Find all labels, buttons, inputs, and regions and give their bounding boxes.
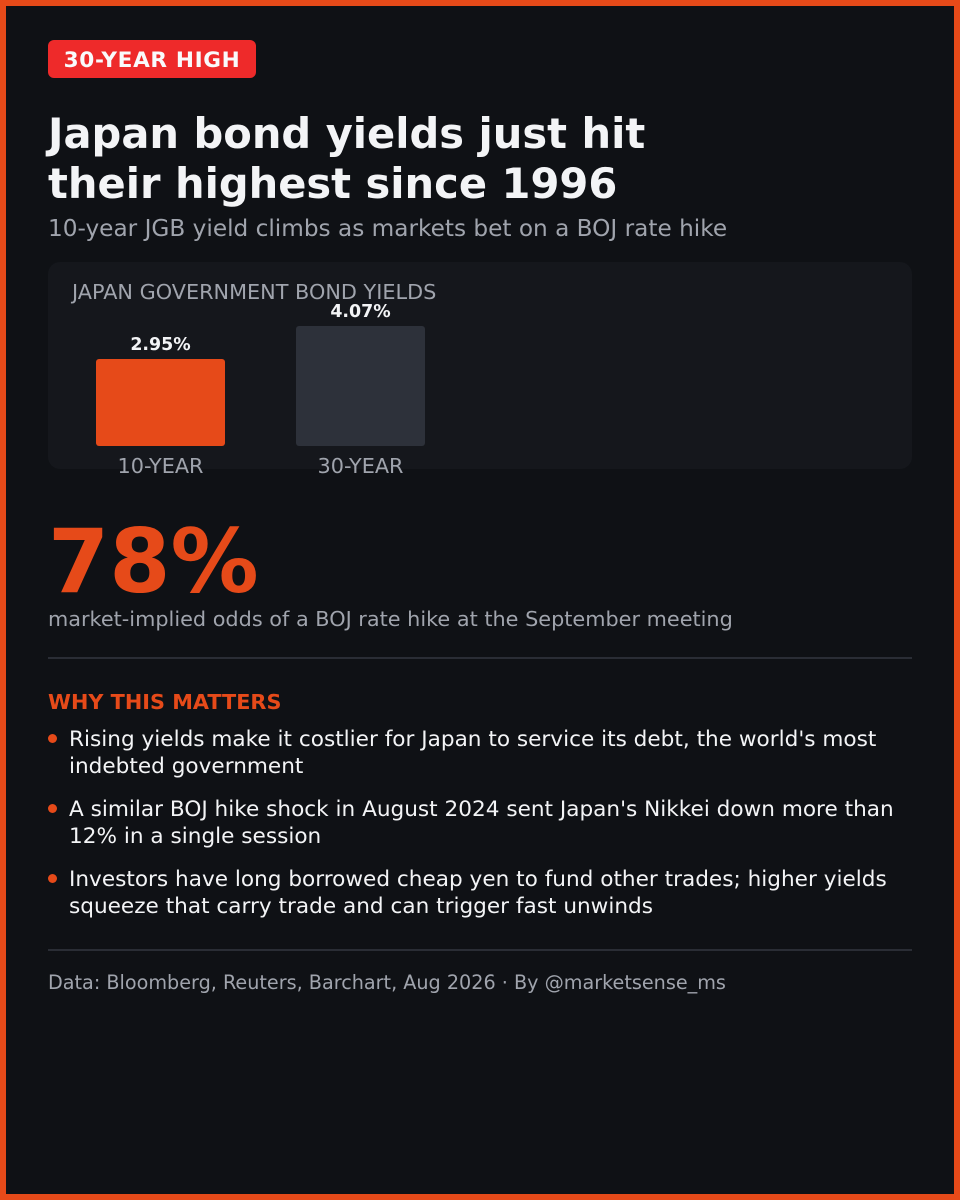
bullet 1 (48, 727, 876, 779)
bullet dot (48, 734, 57, 743)
bullet dot (48, 804, 57, 813)
bullet text: A similar BOJ hike shock in August 2024 sent Japan's Nikkei down more than (69, 797, 894, 822)
title: their highest since 1996 (48, 159, 617, 208)
bullet text (69, 867, 887, 919)
bullet 2 (48, 797, 894, 849)
stat caption: market-implied odds of a BOJ rate hike at the September meeting (48, 607, 733, 631)
bar: 10-year (96, 359, 225, 446)
bar label: 10-year: 10-YEAR (117, 454, 204, 478)
bullet 3 (48, 867, 887, 919)
footer: source credit: Data: Bloomberg, Reuters, Barchart, Aug 2026 · By @marketsense_ms (48, 971, 726, 994)
bar label: 30-year: 30-YEAR (317, 454, 404, 478)
subtitle: 10-year JGB yield climbs as markets bet on a BOJ rate hike (48, 215, 727, 242)
bullet text: indebted government (69, 754, 303, 779)
bar: 30-year (296, 326, 425, 446)
bullet list (48, 727, 894, 919)
big stat: 78%: 78% (48, 510, 259, 613)
bullet text (69, 727, 876, 779)
title (46, 109, 645, 208)
bullet text: 12% in a single session (69, 824, 321, 849)
section heading: why this matters: WHY THIS MATTERS (48, 690, 281, 714)
bullet text: Rising yields make it costlier for Japan to service its debt, the world's most (69, 727, 876, 752)
bullet text: Investors have long borrowed cheap yen to fund other trades; higher yields (69, 867, 887, 892)
chart heading: JAPAN GOVERNMENT BOND YIELDS (72, 280, 436, 304)
bullet text: squeeze that carry trade and can trigger fast unwinds (69, 894, 653, 919)
badge: 30-year high: 30-YEAR HIGH (64, 48, 240, 73)
bullet dot (48, 874, 57, 883)
badge: 30-year high (48, 40, 256, 78)
title: Japan bond yields just hit (48, 109, 645, 158)
bullet text (69, 797, 894, 849)
panel: bond yields chart (48, 262, 912, 469)
bar value: 10-year: 2.95% (130, 335, 191, 355)
bar value: 30-year: 4.07% (330, 302, 391, 322)
